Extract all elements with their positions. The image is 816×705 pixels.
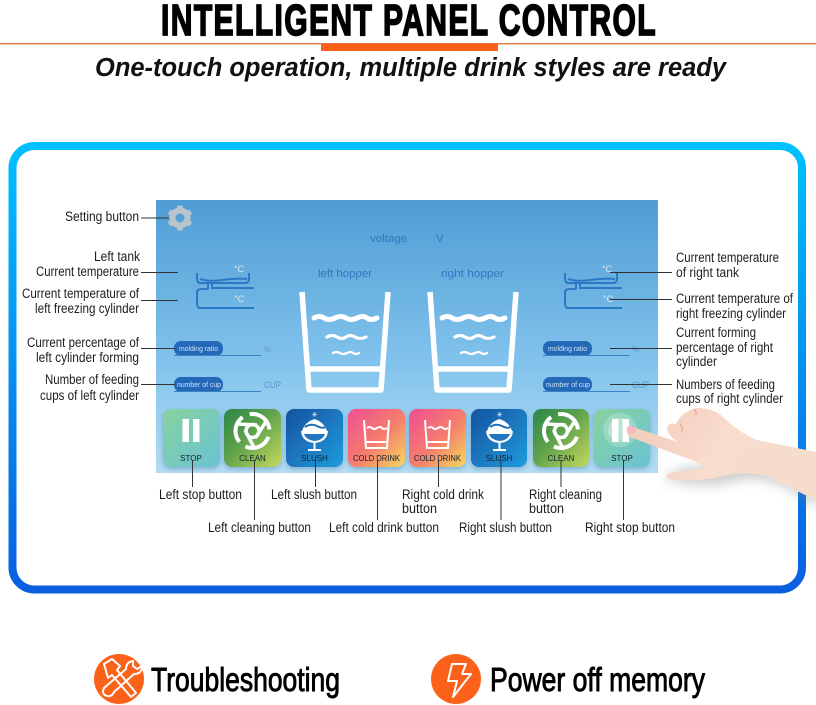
callout: setting button: Setting button xyxy=(65,209,139,224)
icon: right hopper cup xyxy=(430,292,516,390)
left number of cup field xyxy=(174,377,281,392)
button: left clean xyxy=(224,409,281,467)
callout: left cold drink xyxy=(329,460,439,535)
button: left cold drink: COLD DRINK xyxy=(353,454,401,463)
callout: left freezing cylinder xyxy=(22,286,178,316)
button: right cold drink xyxy=(409,409,466,467)
button: right clean: CLEAN xyxy=(548,454,575,463)
callouts right xyxy=(610,250,793,406)
left molding ratio field: molding ratio xyxy=(179,346,218,353)
icon: lightning bolt xyxy=(431,654,481,704)
button: left stop xyxy=(163,409,220,467)
callout: left slush xyxy=(271,460,357,502)
panel: rounded blue frame xyxy=(12,146,802,590)
icon: hammer and wrench xyxy=(94,654,144,704)
subtitle: One-touch operation, multiple drink styles are ready xyxy=(95,54,728,82)
right molding ratio field: % xyxy=(632,345,639,354)
left number of cup field: CUP xyxy=(264,380,281,390)
callout: right freezing cylinder: right freezing cylinder xyxy=(676,306,786,321)
button: right slush: ✳ xyxy=(497,411,503,419)
button: right slush xyxy=(471,409,527,467)
callout: right feeding cups xyxy=(610,377,783,406)
callout: left freezing cylinder: left freezing cylinder xyxy=(35,301,139,316)
voltage readout: V xyxy=(436,233,444,245)
callout: left forming percentage xyxy=(27,335,175,365)
callout: left tank temperature xyxy=(36,249,178,279)
feature: troubleshooting: Troubleshooting xyxy=(151,661,340,698)
callout: right cleaning: Right cleaning xyxy=(529,487,602,502)
callout: left tank temperature: Left tank xyxy=(94,249,140,264)
callout: right tank temperature: of right tank xyxy=(676,265,739,280)
button: right cold drink: COLD DRINK xyxy=(414,454,462,463)
callout: left feeding cups xyxy=(40,372,175,403)
feature: troubleshooting xyxy=(94,654,340,704)
button: right stop xyxy=(594,409,650,467)
button: left slush xyxy=(286,409,343,467)
callout: left tank temperature: Current temperature xyxy=(36,264,139,279)
left tank gauge xyxy=(197,264,254,308)
callout: right forming percentage: percentage of right xyxy=(676,340,773,355)
button: right stop: STOP xyxy=(611,454,633,463)
callout: right cold drink: button xyxy=(402,501,437,516)
button: right slush: SLUSH xyxy=(486,454,513,463)
callout: right cold drink: Right cold drink xyxy=(402,487,484,502)
callout: right freezing cylinder xyxy=(610,291,793,321)
panel: touch screen xyxy=(156,200,658,473)
callouts bottom xyxy=(159,460,675,535)
callout: left feeding cups: cups of left cylinder xyxy=(40,388,139,403)
callout: left forming percentage: Current percentage of xyxy=(27,335,139,350)
feature: power off memory xyxy=(431,654,705,704)
callout: right forming percentage: cylinder xyxy=(676,354,717,369)
button: right clean xyxy=(533,409,589,467)
callout: right slush xyxy=(459,460,552,535)
right number of cup field: number of cup xyxy=(546,382,590,389)
callouts left xyxy=(22,209,178,403)
callout: left slush: Left slush button xyxy=(271,487,357,502)
right number of cup field: CUP xyxy=(632,380,649,390)
callout: left stop xyxy=(159,460,242,502)
callout: right freezing cylinder: Current temperature of xyxy=(676,291,793,306)
right tank gauge xyxy=(565,264,622,308)
left number of cup field: number of cup xyxy=(177,382,221,389)
callout: right cold drink xyxy=(402,460,484,516)
callout: right feeding cups: cups of right cylinder xyxy=(676,391,783,406)
callout: right tank temperature: Current temperature xyxy=(676,250,779,265)
callout: right stop xyxy=(585,460,675,535)
callout: right cleaning xyxy=(529,460,602,516)
callout: right slush: Right slush button xyxy=(459,520,552,535)
feature: power off memory: Power off memory xyxy=(490,661,705,698)
callout: left stop: Left stop button xyxy=(159,487,242,502)
callout: left freezing cylinder: Current temperature of xyxy=(22,286,139,301)
button: left stop: STOP xyxy=(180,454,202,463)
right tank gauge: °C xyxy=(603,294,614,304)
callout: right forming percentage xyxy=(610,325,773,369)
icon: left hopper cup xyxy=(302,292,388,390)
right molding ratio field: molding ratio xyxy=(548,346,587,353)
right number of cup field xyxy=(543,377,649,392)
voltage readout: voltage xyxy=(370,233,407,245)
button: left slush: ✳ xyxy=(312,411,318,419)
callout: right stop: Right stop button xyxy=(585,520,675,535)
icon: settings gear xyxy=(169,206,191,230)
callout: right tank temperature xyxy=(610,250,779,280)
left tank gauge: °C xyxy=(234,294,245,304)
button: left cold drink xyxy=(348,409,405,467)
callout: left forming percentage: left cylinder forming xyxy=(36,350,139,365)
left molding ratio field xyxy=(174,341,271,356)
callout: left feeding cups: Number of feeding xyxy=(45,372,139,387)
callout: right forming percentage: Current forming xyxy=(676,325,756,340)
right tank gauge: °C xyxy=(602,264,613,274)
callout: right cleaning: button xyxy=(529,501,564,516)
hopper label left: left hopper xyxy=(318,268,372,280)
callout: left cleaning xyxy=(208,460,311,535)
right molding ratio field xyxy=(543,341,639,356)
hopper label right: right hopper xyxy=(441,268,504,280)
hand pressing the stop button xyxy=(626,408,816,508)
callout: left cleaning: Left cleaning button xyxy=(208,520,311,535)
button: left slush: SLUSH xyxy=(301,454,328,463)
left molding ratio field: % xyxy=(264,345,271,354)
callout: left cold drink: Left cold drink button xyxy=(329,520,439,535)
title rule with orange accent xyxy=(0,43,816,51)
button: left clean: CLEAN xyxy=(239,454,266,463)
left tank gauge: °C xyxy=(234,264,245,274)
voltage readout xyxy=(370,233,444,245)
callout: right feeding cups: Numbers of feeding xyxy=(676,377,775,392)
